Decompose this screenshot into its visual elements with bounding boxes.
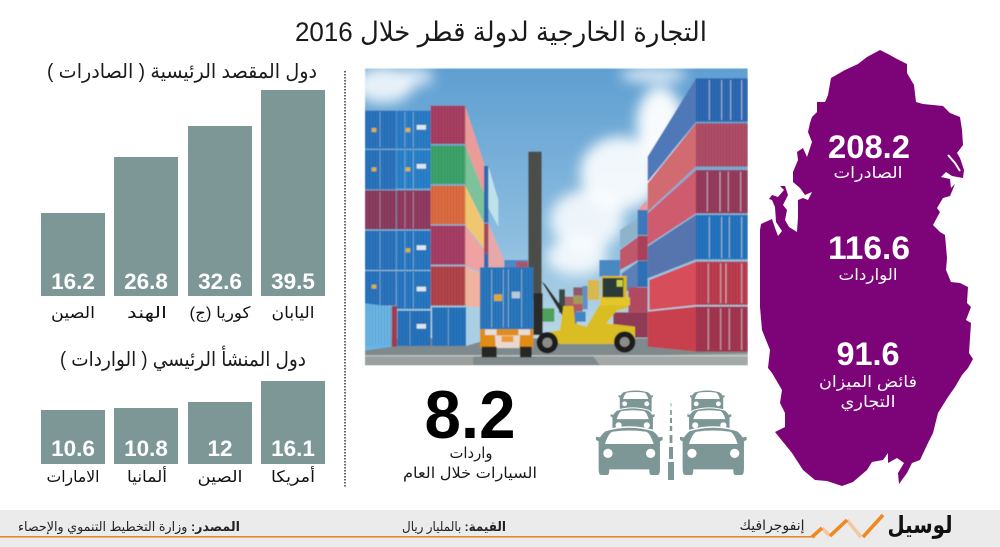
bar: USA 16.1: أمريكا <box>271 466 315 487</box>
figure: exports 208.2: الصادرات <box>834 165 902 183</box>
bar: China 16.2: 16.2 <box>51 269 95 294</box>
bar: India 26.8 <box>114 157 178 323</box>
bar: USA 16.1: 16.1 <box>271 436 315 461</box>
bar: India 26.8: 26.8 <box>124 269 168 294</box>
figure: trade surplus 91.6 <box>819 336 917 412</box>
car imports figure: السيارات خلال العام <box>403 465 537 482</box>
heading: export destinations: دول المقصد الرئيسية ( الصادرات ) <box>47 61 317 83</box>
forklift body <box>543 302 635 344</box>
figure: trade surplus 91.6: التجاري <box>840 394 896 412</box>
map of Qatar with key figures <box>760 50 973 486</box>
truck and container <box>480 267 533 329</box>
photo: container yard with forklift <box>353 67 748 365</box>
third column fronts <box>431 106 465 144</box>
car imports figure: واردات <box>450 445 492 462</box>
bar: India 26.8: الهند <box>127 305 167 323</box>
figure: imports 116.6 <box>828 230 910 285</box>
right stack sides <box>648 78 696 182</box>
figure: exports 208.2 <box>828 129 910 183</box>
bar: Japan 39.5: 39.5 <box>271 269 315 294</box>
figure: imports 116.6: 116.6 <box>828 230 910 266</box>
ground <box>365 338 748 365</box>
left stack fronts <box>365 111 396 149</box>
bar: China 12: 12 <box>207 436 233 461</box>
back stacks <box>504 260 528 268</box>
logo chevrons <box>812 515 883 537</box>
bar: UAE 10.6: الامارات <box>46 469 100 487</box>
panel: main export destinations chart <box>41 61 325 323</box>
bar: Germany 10.8: ألمانيا <box>127 466 167 486</box>
bar: China 12: الصين <box>198 469 242 487</box>
figure: exports 208.2: 208.2 <box>828 129 910 165</box>
map shape <box>760 50 973 486</box>
car imports figure <box>403 377 537 482</box>
third column sides <box>465 106 484 193</box>
bar: UAE 10.6: 10.6 <box>51 436 95 461</box>
bar: South Korea 32.6: 32.6 <box>198 269 242 294</box>
figure: trade surplus 91.6: 91.6 <box>836 336 900 372</box>
bar: South Korea 32.6: كوريا (ج) <box>190 305 251 323</box>
bar: USA 16.1 <box>261 381 325 487</box>
right stack fronts <box>696 78 748 122</box>
bar: China 12 <box>188 402 252 487</box>
title: التجارة الخارجية لدولة قطر خلال 2016 <box>295 17 707 48</box>
value unit note: القيمة: بالمليار ريال <box>402 519 506 535</box>
bar: Japan 39.5: اليابان <box>272 305 314 322</box>
bar: China 16.2: الصين <box>51 305 95 323</box>
panel: main import origins chart <box>41 345 325 487</box>
bar: Germany 10.8 <box>114 408 178 486</box>
bar: China 16.2 <box>41 213 105 323</box>
footer band <box>0 510 1000 547</box>
bar: South Korea 32.6 <box>188 126 252 323</box>
bar: UAE 10.6 <box>41 410 105 487</box>
icon: cars on a two-lane road <box>596 391 747 480</box>
bar: Germany 10.8: 10.8 <box>124 436 168 461</box>
infographic label: إنفوجرافيك <box>740 517 805 534</box>
logo wordmark: لوسيل <box>888 512 952 539</box>
heading: import origins: دول المنشأ الرئيسي ( الواردات ) <box>60 345 306 372</box>
source note: المصدر: وزارة التخطيط التنموي والإحصاء <box>18 519 240 535</box>
bar: Japan 39.5 <box>261 90 325 322</box>
forklift mast <box>528 152 542 300</box>
car imports figure: 8.2 <box>424 377 516 453</box>
figure: trade surplus 91.6: فائض الميزان <box>819 374 917 392</box>
figure: imports 116.6: الواردات <box>838 267 898 285</box>
